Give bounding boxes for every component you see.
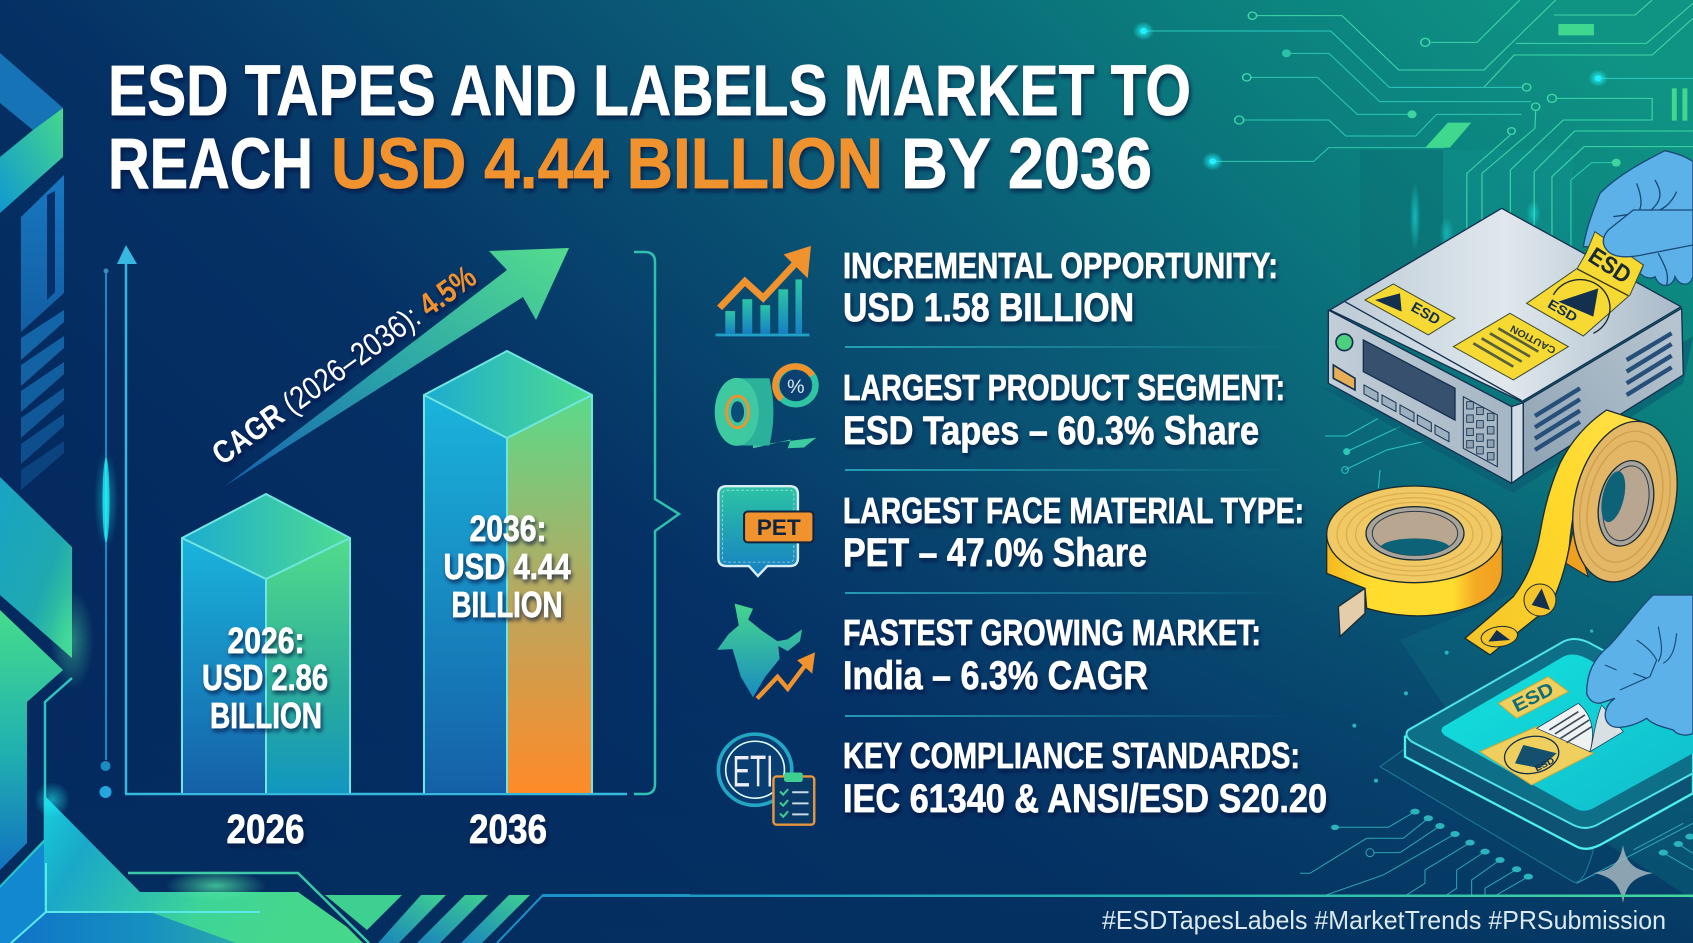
tape tab xyxy=(1338,588,1365,637)
arrow: CAGR growth xyxy=(225,248,569,486)
title xyxy=(108,52,1191,204)
icon: standards seal and clipboard: ETI xyxy=(733,746,773,797)
year labels: 2026 xyxy=(226,806,304,852)
peeling symbol label xyxy=(1480,703,1623,785)
year labels: 2036 xyxy=(469,806,547,852)
sticker: peeling ESD label: ESD xyxy=(1545,296,1580,325)
year labels xyxy=(226,806,547,852)
illustration: glowing pad with peeled label xyxy=(1380,595,1693,883)
fact: largest face material xyxy=(718,486,1304,576)
roll band shadow side xyxy=(1566,530,1588,577)
bar 2036 value: USD 4.44 xyxy=(444,546,570,587)
fact: largest product segment xyxy=(715,366,1285,453)
illustration: upright tape roll with strip xyxy=(1465,410,1693,655)
sticker: peeling ESD label: ESD xyxy=(1583,242,1636,290)
chart: market size 2026 vs 2036 xyxy=(94,245,679,852)
fact: incremental opportunity xyxy=(716,245,1278,336)
bar 2036 xyxy=(424,351,592,793)
footer line xyxy=(543,894,1693,897)
title line 2: REACH xyxy=(108,125,313,204)
fact: fastest growing market xyxy=(717,604,1261,699)
gloved hand xyxy=(1587,595,1693,735)
icon: standards seal and clipboard xyxy=(718,734,814,825)
bar 2036 value: BILLION xyxy=(452,584,562,625)
vents xyxy=(1535,333,1672,450)
icon: tape roll with percent: % xyxy=(787,377,805,398)
text block: PET – 47.0% Share xyxy=(843,531,1147,575)
title line 2 xyxy=(108,125,1152,204)
text block: IEC 61340 & ANSI/ESD S20.20 xyxy=(843,777,1327,821)
dividers xyxy=(845,346,1295,717)
bar 2026 value: BILLION xyxy=(210,695,322,736)
icon: growth chart xyxy=(716,246,811,336)
bar 2036 value xyxy=(444,508,570,625)
small ESD label xyxy=(1498,677,1568,718)
icon: tape roll with percent xyxy=(715,366,816,448)
text block: KEY COMPLIANCE STANDARDS: xyxy=(843,735,1300,776)
tape face xyxy=(1327,486,1502,583)
circuit traces top right xyxy=(1133,0,1693,267)
device controls xyxy=(1333,334,1497,467)
bracket xyxy=(634,252,679,794)
illustration: flat tape roll xyxy=(1327,486,1502,637)
text block xyxy=(843,245,1278,330)
gloved hand xyxy=(1583,151,1693,285)
text block xyxy=(843,490,1304,575)
title line 1: ESD TAPES AND LABELS MARKET TO xyxy=(108,52,1191,131)
text block xyxy=(843,367,1285,453)
key facts list xyxy=(715,245,1327,825)
text block: ESD Tapes – 60.3% Share xyxy=(843,409,1259,453)
illustration: ESD device with labels xyxy=(1320,151,1693,493)
bar 2026 value: 2026: xyxy=(228,620,304,661)
text block: USD 1.58 BILLION xyxy=(843,286,1134,330)
text block xyxy=(843,612,1261,698)
sticker: caution: CAUTION xyxy=(1509,322,1558,355)
small ESD label: ESD xyxy=(1509,678,1557,716)
title line 2: BY 2036 xyxy=(901,125,1152,204)
icon: PET label xyxy=(718,486,813,576)
glow streaks xyxy=(1410,182,1541,252)
icon: India map with arrow xyxy=(717,604,815,699)
sticker: caution xyxy=(1453,313,1568,380)
device body xyxy=(1328,208,1683,483)
title line 2: USD 4.44 BILLION xyxy=(331,125,883,204)
side guide line with dots xyxy=(94,268,118,798)
bar 2026 value: USD 2.86 xyxy=(202,657,328,698)
text block: INCREMENTAL OPPORTUNITY: xyxy=(843,245,1278,286)
text block: India – 6.3% CAGR xyxy=(843,654,1148,698)
icon: sparkle watermark xyxy=(1594,845,1653,903)
circuit traces bottom right xyxy=(1300,629,1693,896)
left decorative shapes xyxy=(0,53,690,943)
tape strip xyxy=(1465,410,1645,655)
peeling symbol label: ESD xyxy=(1533,755,1556,773)
text block xyxy=(843,735,1327,821)
sticker: ESD xyxy=(1365,284,1455,335)
bar 2026 value xyxy=(202,620,328,736)
circuit traces under device xyxy=(1325,418,1423,488)
fact: compliance standards xyxy=(718,734,1327,825)
icon: PET label: PET xyxy=(757,515,801,540)
CAGR label: CAGR (2026–2036): 4.5% xyxy=(205,258,483,472)
text block: FASTEST GROWING MARKET: xyxy=(843,612,1261,653)
tape band xyxy=(1327,537,1502,616)
roll face xyxy=(1557,411,1693,593)
axes xyxy=(117,245,627,794)
gloved thumb xyxy=(1603,210,1693,257)
bar 2036 value: 2036: xyxy=(470,508,546,549)
sticker: peeling ESD label xyxy=(1527,210,1693,336)
text block: LARGEST PRODUCT SEGMENT: xyxy=(843,367,1285,408)
bar 2026 xyxy=(182,494,350,793)
text block: LARGEST FACE MATERIAL TYPE: xyxy=(843,490,1304,531)
sticker: ESD: ESD xyxy=(1408,300,1443,329)
hashtags: #ESDTapesLabels #MarketTrends #PRSubmission xyxy=(1102,905,1666,935)
